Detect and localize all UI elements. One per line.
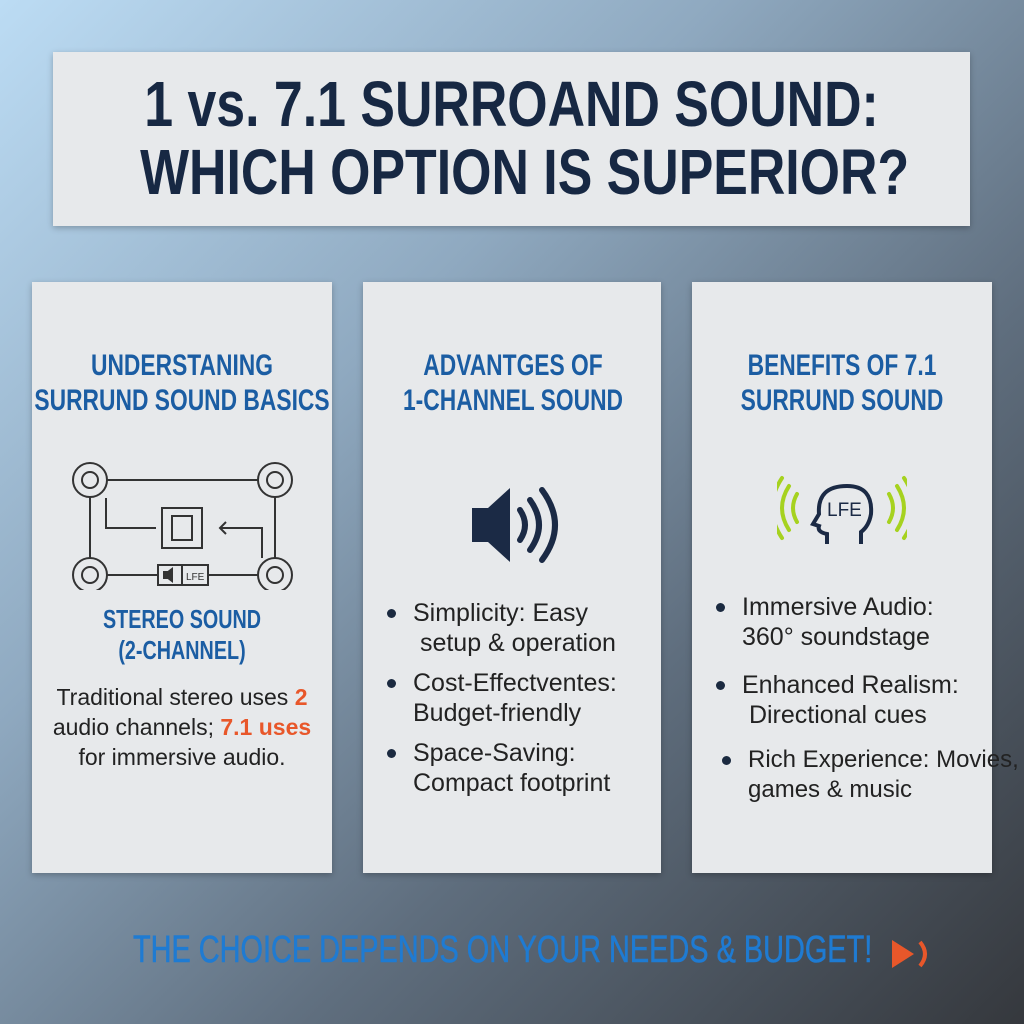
panel: 1-channel: Space-Saving: <box>413 739 576 767</box>
panel: 7.1: 360° soundstage <box>742 623 930 651</box>
icon: speaker <box>472 487 558 563</box>
heading: 1-channel: ADVANTGES OF <box>423 349 603 382</box>
subheading: stereo: STEREO SOUND <box>103 604 261 634</box>
heading: basics: UNDERSTANING <box>91 349 273 382</box>
heading: basics <box>34 349 330 417</box>
heading: basics: SURRUND SOUND BASICS <box>34 384 330 417</box>
panel: 7.1: games & music <box>748 776 912 803</box>
panel: 1-channel <box>363 282 661 873</box>
icon: play arrow <box>892 940 928 968</box>
list: benefits <box>716 593 1019 803</box>
heading: 7.1: BENEFITS OF 7.1 <box>748 349 936 382</box>
title: WHICH OPTION IS SUPERIOR? <box>140 136 909 208</box>
panel: 1-channel: setup & operation <box>420 629 616 657</box>
subheading: stereo: (2-CHANNEL) <box>118 635 246 665</box>
panel: basics <box>32 282 332 873</box>
text: stereo description: for immersive audio. <box>78 744 286 770</box>
panel: 1-channel: Compact footprint <box>413 769 610 797</box>
heading: 7.1: SURRUND SOUND <box>741 384 943 417</box>
panel: 1-channel: Simplicity: Easy <box>413 599 588 627</box>
heading: 7.1 <box>741 349 943 417</box>
panel: 7.1: Directional cues <box>749 701 927 729</box>
icon: speaker layout diagram: LFE <box>186 572 205 583</box>
title <box>53 52 970 226</box>
title: 1 vs. 7.1 SURROAND SOUND: <box>144 68 879 140</box>
subheading: stereo <box>103 604 261 665</box>
icon: speaker layout diagram <box>72 462 293 590</box>
panel: 7.1: Enhanced Realism: <box>742 671 959 699</box>
heading: 1-channel: 1-CHANNEL SOUND <box>403 384 623 417</box>
panel: 1-channel: Budget-friendly <box>413 699 581 727</box>
footer text: THE CHOICE DEPENDS ON YOUR NEEDS & BUDGET! <box>133 929 872 971</box>
panel: 7.1 <box>692 282 992 873</box>
panel: 1-channel: Cost-Effectventes: <box>413 669 617 697</box>
icon: head with LFE <box>777 476 907 544</box>
panel: 7.1: Immersive Audio: <box>742 593 934 621</box>
text: stereo description: Traditional stereo uses 2 <box>56 684 308 710</box>
text: stereo description: audio channels; 7.1 uses <box>53 714 311 740</box>
panel: 7.1: Rich Experience: Movies, <box>748 746 1019 773</box>
heading: 1-channel <box>403 349 623 417</box>
list: advantages <box>387 599 617 797</box>
icon: head with LFE: LFE <box>827 500 862 521</box>
text: stereo description <box>53 684 311 770</box>
